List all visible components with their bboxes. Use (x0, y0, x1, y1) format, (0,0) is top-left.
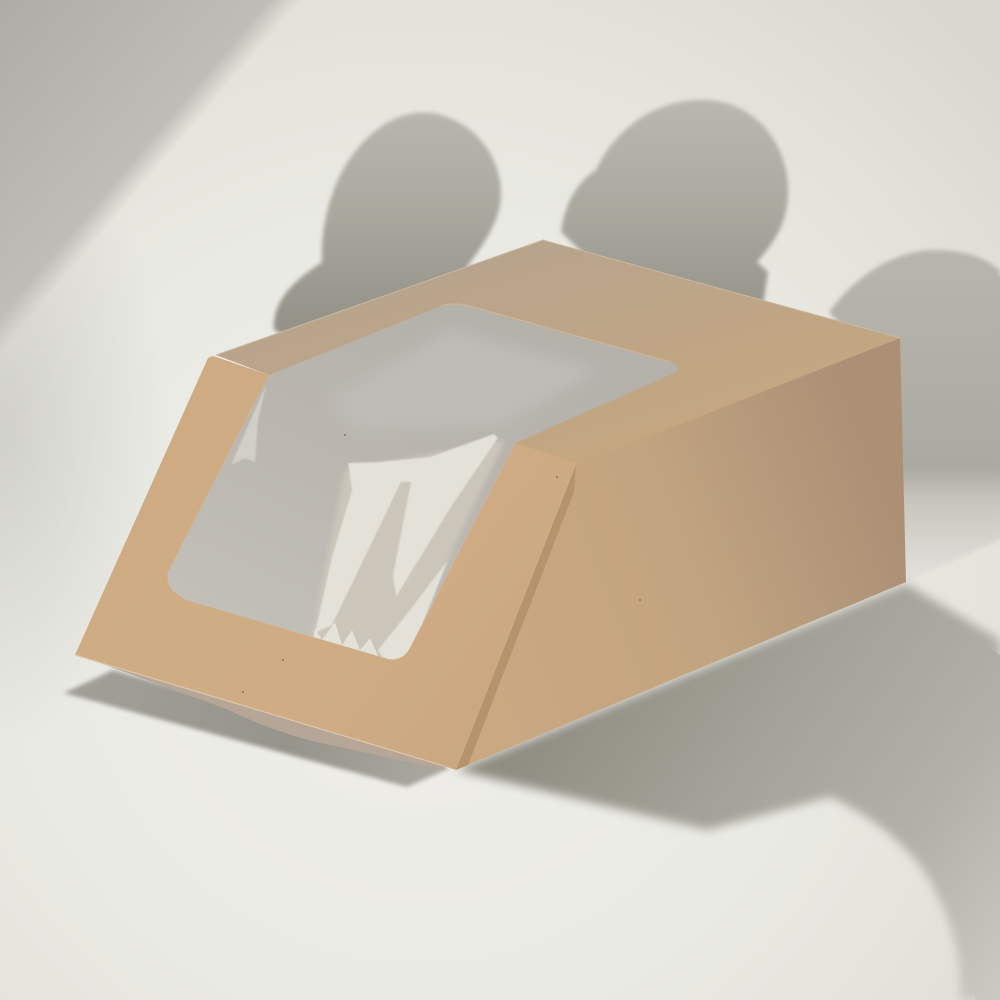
bright reflection lower right (378, 560, 448, 662)
box top edge highlight (216, 240, 900, 355)
shadow: middle round silhouette (561, 100, 788, 305)
box window film (168, 304, 678, 660)
box (75, 240, 906, 770)
warm tone in the lower film (310, 440, 505, 660)
left edge soft shading (0, 110, 170, 750)
soft haze on the film (349, 336, 580, 422)
small reflection on the left side (231, 385, 266, 465)
bright flecks at the film bottom (314, 622, 378, 656)
shadow: floor shadow left of the box (64, 670, 450, 787)
kraft specks (242, 434, 641, 693)
shadow: top-left window shadow (0, 0, 320, 370)
shadow: left round silhouette (274, 112, 501, 345)
box top face (216, 240, 900, 465)
box lower edge highlight (75, 655, 444, 766)
box side face (456, 338, 906, 770)
box window rim (441, 304, 670, 362)
box underside strip (100, 650, 445, 770)
shadow: floor shadow behind the box (456, 584, 1000, 1000)
bright reflection strands (315, 434, 498, 633)
box window reflections (231, 330, 600, 662)
box fold strip beside the front edge (456, 465, 576, 770)
shadow: right silhouette (829, 250, 1000, 582)
box front face frame (75, 356, 576, 770)
